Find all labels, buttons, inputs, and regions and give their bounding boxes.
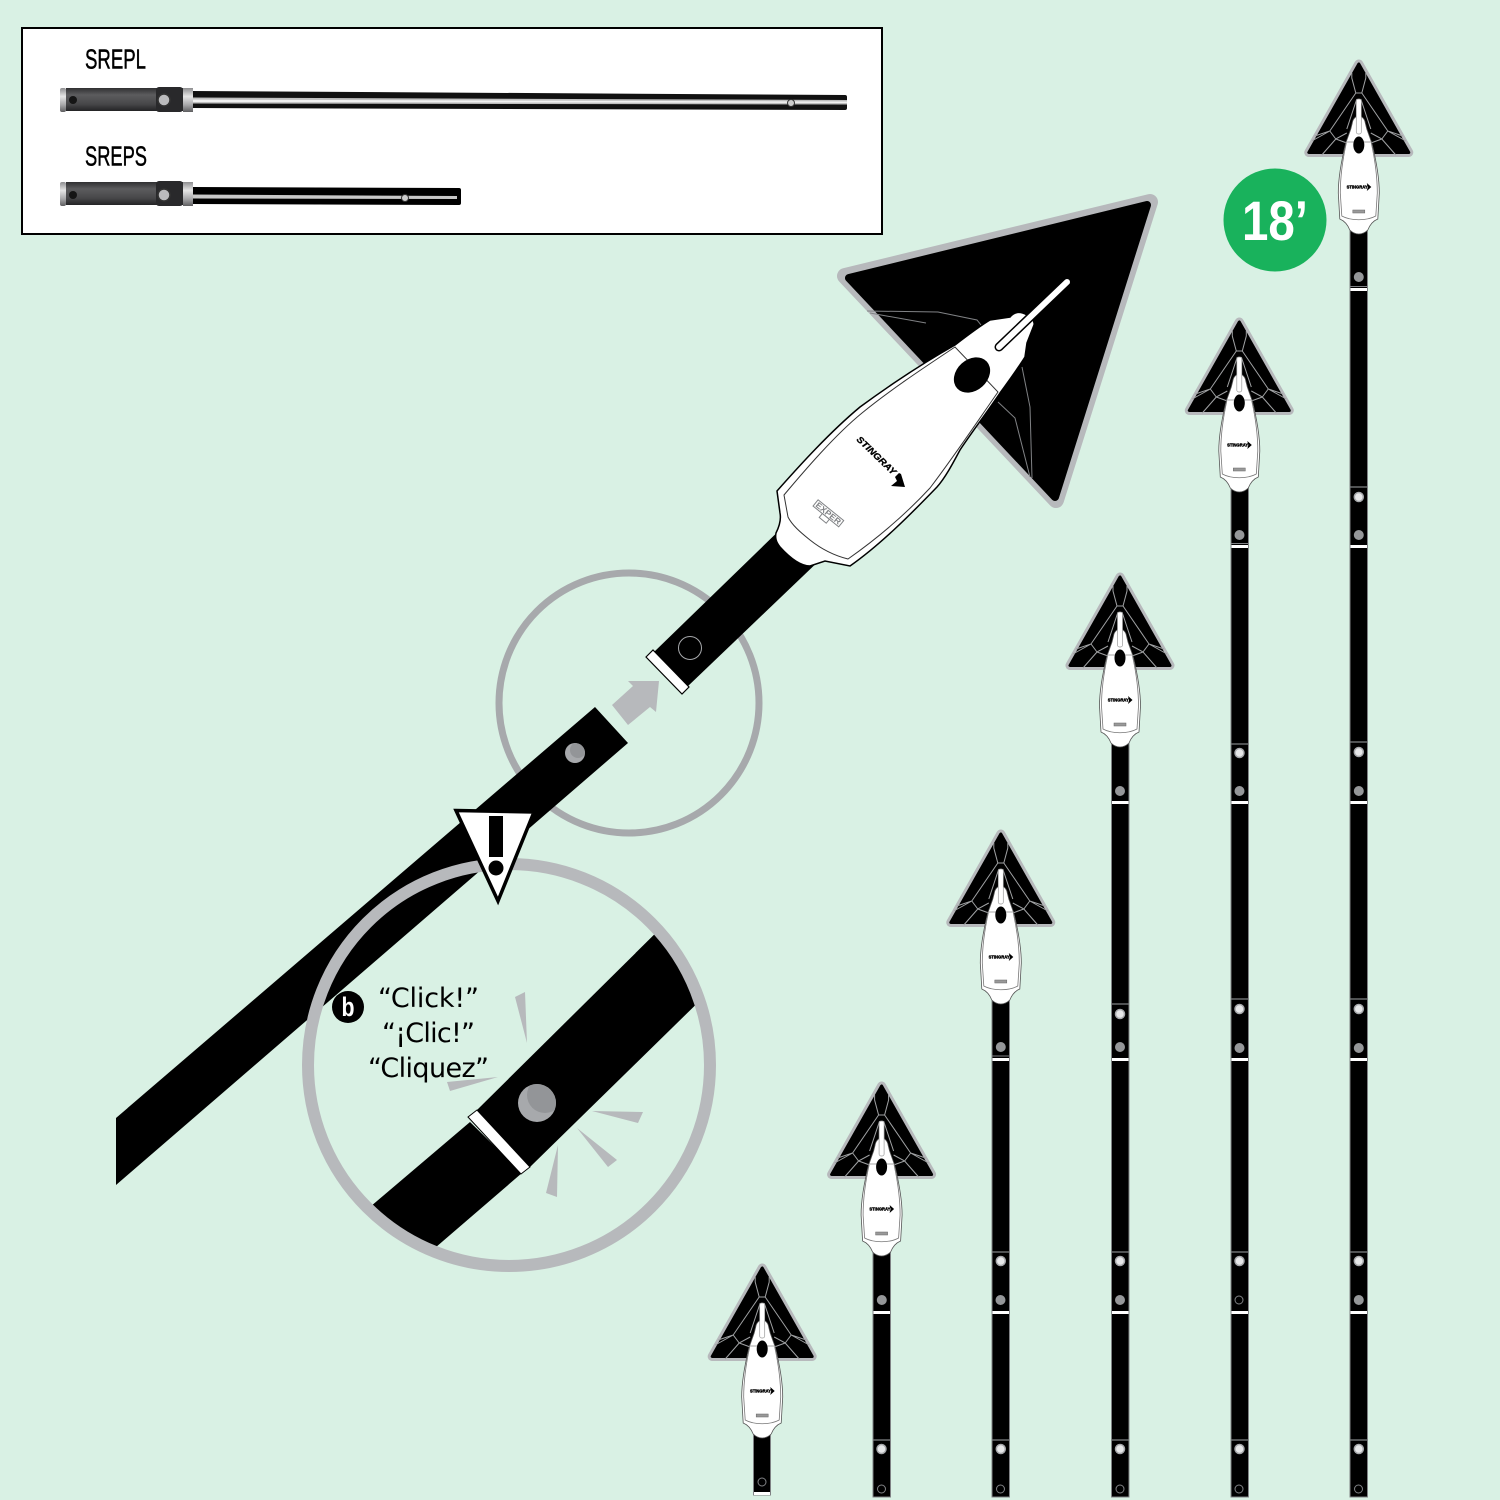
head body xyxy=(776,282,1067,566)
magnifier ring xyxy=(308,864,710,1266)
brand: STINGRAY xyxy=(855,434,905,487)
small assembly 4 xyxy=(1070,577,1170,1497)
small assembly 5 xyxy=(1189,322,1289,1497)
head triangle xyxy=(845,202,1150,500)
pole: SREPL long xyxy=(60,87,847,112)
badge: 18 foot height xyxy=(1224,168,1326,272)
magnified detail: locked connection xyxy=(308,864,720,1266)
click text xyxy=(368,983,489,1084)
click text: “¡Clic!” xyxy=(382,1018,475,1049)
click text: “Click!” xyxy=(378,983,479,1014)
small brand text: STINGRAY xyxy=(1108,698,1129,702)
shafts inside magnifier xyxy=(372,934,695,1246)
click text: “Cliquez” xyxy=(368,1053,489,1084)
panel: extension pole models xyxy=(22,28,882,234)
small brand text: STINGRAY xyxy=(1347,184,1368,190)
large pole section with spring pin xyxy=(116,707,628,1185)
warning icon xyxy=(456,810,534,901)
ring: connection detail circle xyxy=(499,573,759,833)
large stingray head xyxy=(776,202,1150,566)
click sparks xyxy=(447,992,643,1197)
small assembly 1 xyxy=(712,1268,812,1495)
badge: 18 foot height: 18’ xyxy=(1242,189,1308,252)
small brand text: STINGRAY xyxy=(869,1206,890,1212)
pole: SREPS short xyxy=(60,181,461,206)
small assembly 3 xyxy=(951,834,1051,1497)
arrow: connect direction xyxy=(612,681,659,725)
small brand text: STINGRAY xyxy=(989,954,1010,960)
large pole section with connector xyxy=(646,520,825,694)
logo xyxy=(810,500,844,531)
label: SREPS: SREPS xyxy=(85,140,147,172)
label: SREPL: SREPL xyxy=(85,44,146,74)
spring pin xyxy=(518,1084,556,1122)
small assembly 6 xyxy=(1309,64,1409,1497)
small brand text: STINGRAY xyxy=(750,1388,771,1394)
brand: STINGRAY: STINGRAY xyxy=(855,434,899,478)
small brand text: STINGRAY xyxy=(1227,442,1248,448)
small assembly 2 xyxy=(832,1086,932,1497)
logo: EXPER xyxy=(814,501,843,527)
step badge b: b xyxy=(342,992,354,1022)
step badge b xyxy=(332,991,364,1023)
